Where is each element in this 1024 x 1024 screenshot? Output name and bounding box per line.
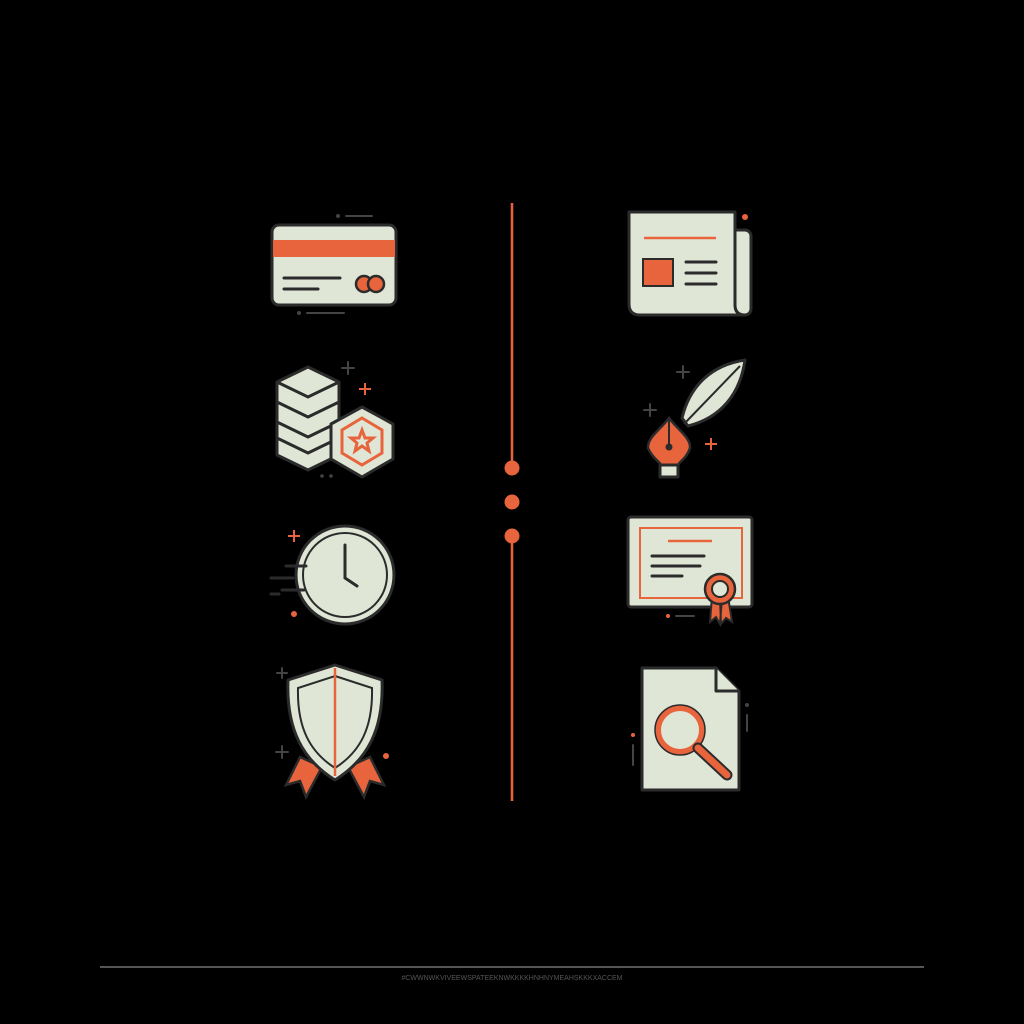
icon: quill and pen nib xyxy=(644,360,745,477)
footer text: #CWWNWKVIVEEWSPATEEKNWKKKKHNHNYMEAHSKKKXACCEM xyxy=(401,975,623,982)
icon: credit card xyxy=(272,214,396,315)
icon: fast clock xyxy=(271,526,394,624)
icon: shield with ribbons xyxy=(276,665,389,797)
icon: certificate xyxy=(628,517,752,624)
icon: document search xyxy=(631,668,749,790)
timeline xyxy=(504,203,520,801)
icon: stacked coins with badge xyxy=(277,362,393,478)
icon: newspaper xyxy=(629,212,751,315)
footer rule xyxy=(100,966,924,968)
